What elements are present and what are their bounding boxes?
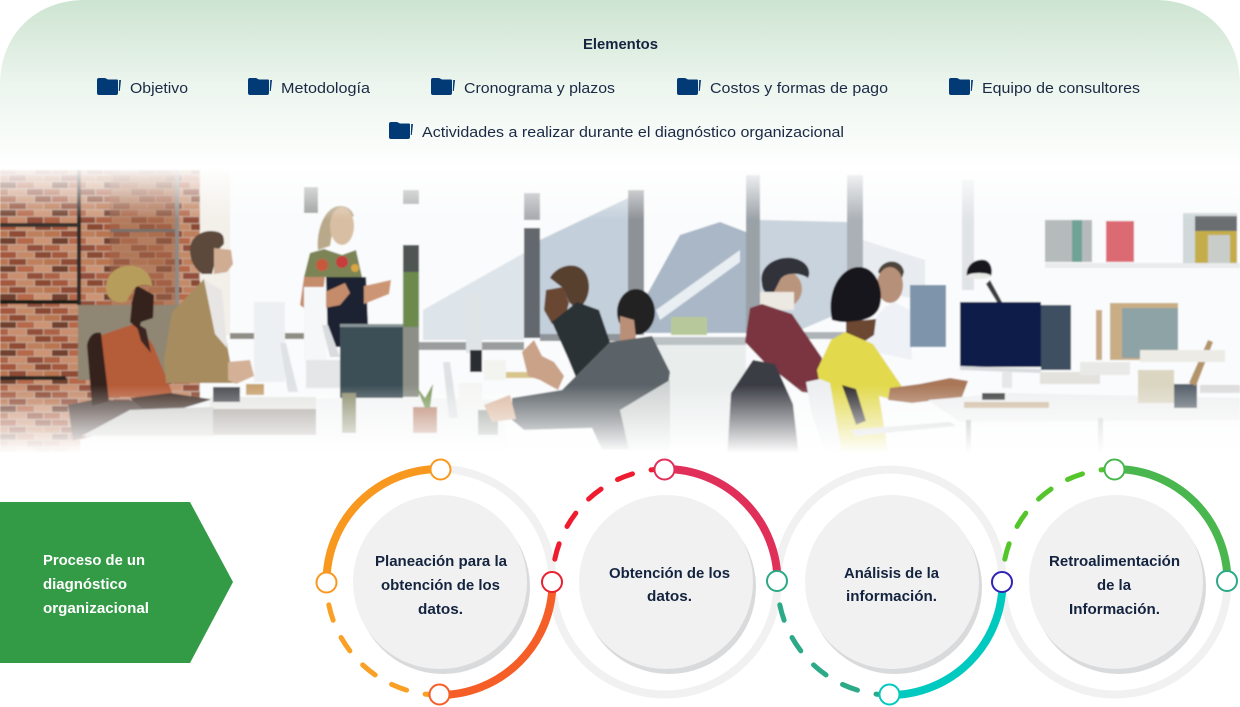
woman in orange dress [68, 266, 215, 441]
green arrow banner: diagnóstico [43, 577, 127, 593]
man in maroon shirt [727, 258, 822, 455]
fades [0, 165, 1240, 220]
item: Objetivo [97, 78, 188, 97]
step 1: Planeación [326, 469, 552, 695]
man in turban and yellow shirt [806, 267, 968, 457]
step 4: Retroalimentación: Retroalimentación [1049, 554, 1180, 570]
ring connector nodes [316, 460, 1237, 704]
heading: Elementos: Elementos [583, 37, 658, 53]
window frames [304, 187, 318, 213]
brick wall [0, 170, 200, 455]
step 1: Planeación: obtención de los [381, 578, 500, 594]
photo: office team meeting [0, 165, 1240, 465]
step 3: Análisis: Análisis de la [844, 566, 940, 582]
header panel: elementos [0, 0, 1240, 170]
item: Metodología: Metodología [281, 80, 371, 97]
green arrow banner [0, 502, 233, 663]
man in tan blazer [164, 231, 254, 384]
man in grey jacket [484, 289, 670, 454]
item: Cronograma y plazos: Cronograma y plazos [464, 80, 615, 97]
item: Cronograma y plazos [431, 78, 615, 97]
step 2: Obtención: datos. [647, 589, 692, 605]
desk items centre [466, 293, 482, 353]
step 2: Obtención: Obtención de los [609, 566, 730, 582]
step 2: Obtención [552, 469, 778, 674]
standing woman [300, 206, 391, 347]
dark cabinet [340, 324, 403, 398]
green arrow banner: organizacional [43, 601, 149, 617]
step 1: Planeación: datos. [418, 602, 463, 618]
item: Costos y formas de pago: Costos y formas de pago [710, 80, 888, 97]
white desk left [80, 398, 510, 455]
item: Metodología [248, 78, 371, 97]
step 3: Análisis: información. [846, 589, 937, 605]
white desk right [928, 393, 1240, 422]
desktop monitors [254, 302, 285, 382]
item: Equipo de consultores [949, 78, 1140, 97]
item: Actividades a realizar: Actividades a realizar durante el diagnóstico organizacional [422, 124, 844, 141]
man in black t-shirt [522, 265, 614, 392]
house seen through windows [423, 253, 524, 340]
item: Objetivo: Objetivo [130, 80, 188, 97]
man in white shirt background [866, 262, 946, 360]
ring tracks [440, 469, 1228, 695]
step 4: Retroalimentación: Información. [1069, 602, 1160, 618]
step 4: Retroalimentación: de la [1097, 578, 1132, 594]
item: Equipo de consultores: Equipo de consultores [982, 80, 1140, 97]
main dark monitor and lamp [960, 260, 1071, 388]
shelf and books [1045, 213, 1240, 362]
step 3: Análisis [778, 495, 1002, 695]
step 4: Retroalimentación [1002, 469, 1228, 674]
step 1: Planeación: Planeación para la [375, 554, 508, 570]
green arrow banner: Proceso de un [43, 553, 145, 569]
